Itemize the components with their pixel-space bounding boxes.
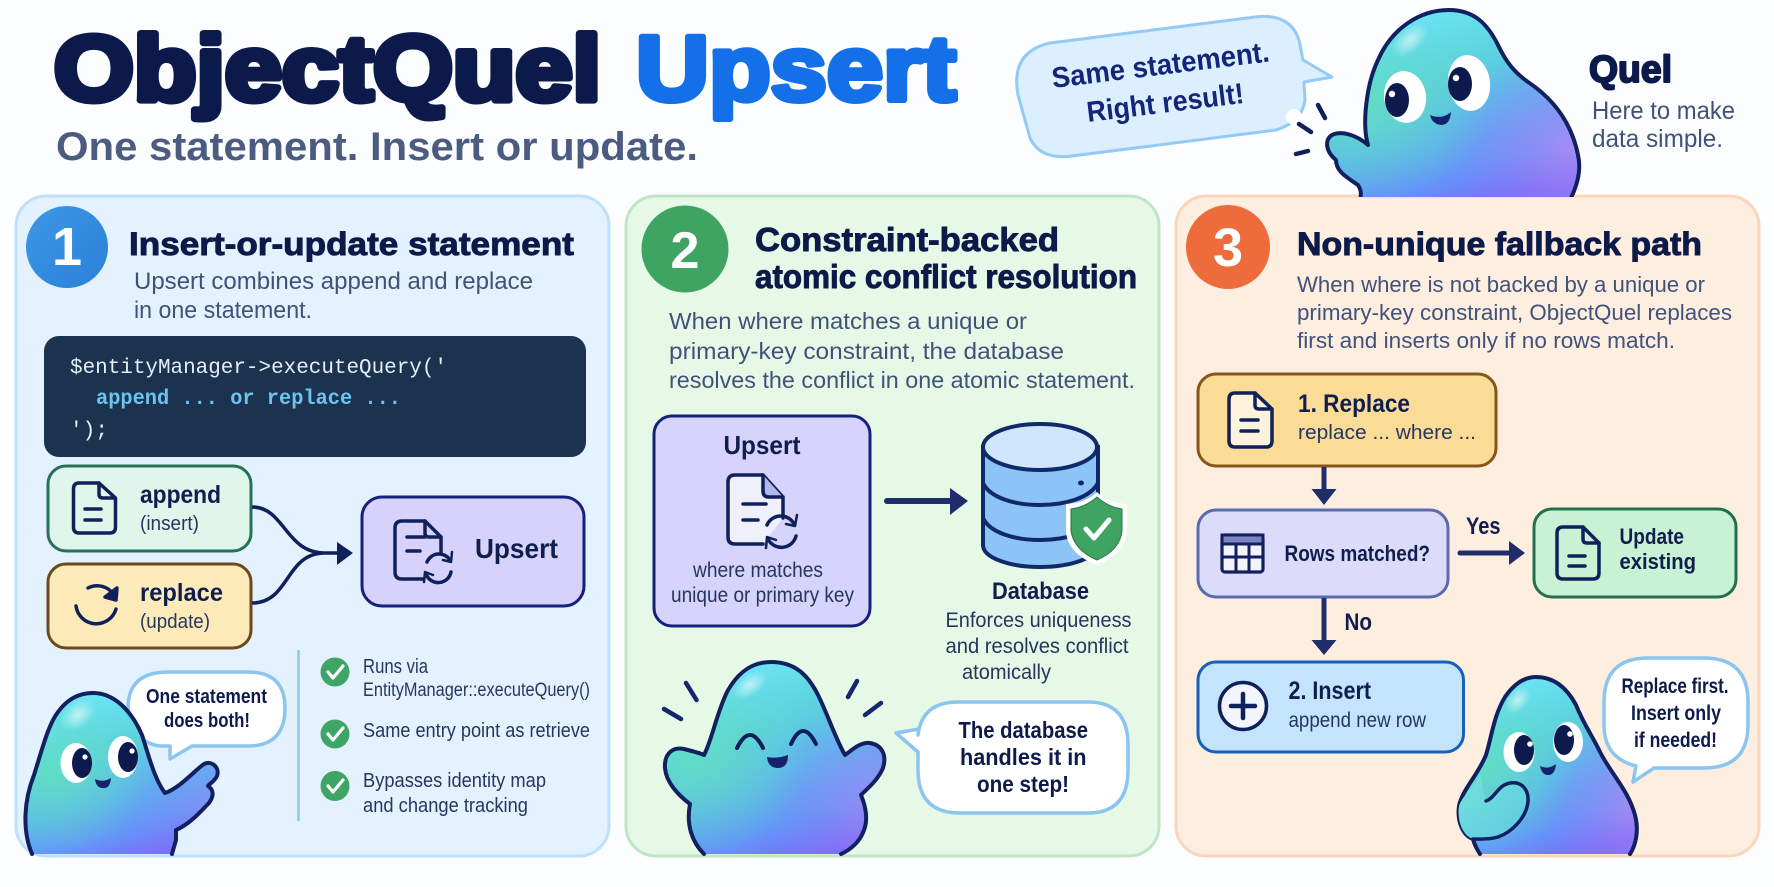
icon: document xyxy=(74,483,116,533)
box: append: append xyxy=(140,481,221,509)
label: database: Database xyxy=(992,578,1089,605)
panel: insert-or-update statement xyxy=(16,196,609,856)
callout: replace first: Replace first. xyxy=(1622,675,1728,698)
divider xyxy=(297,650,300,821)
heading 3: Non-unique fallback path xyxy=(1297,226,1702,262)
icon: document with sync xyxy=(728,475,797,548)
badge 2: 2 xyxy=(671,222,699,280)
description 3: primary-key constraint, ObjectQuel replaces xyxy=(1297,300,1732,325)
box: update existing xyxy=(1534,509,1736,597)
item: bypasses identity map: and change tracking xyxy=(363,795,528,817)
icon: document with sync xyxy=(395,521,452,583)
text: database description: atomically xyxy=(962,661,1051,684)
item: same entry point xyxy=(320,720,590,748)
description 2: primary-key constraint, the database xyxy=(669,338,1064,364)
description 2: resolves the conflict in one atomic statement. xyxy=(669,367,1135,393)
description 1: in one statement. xyxy=(134,297,312,324)
callout: same statement: Right result! xyxy=(1085,78,1246,129)
arrow: merge into upsert xyxy=(252,507,353,603)
title: Upsert xyxy=(636,18,956,120)
callout: database handles it: The database xyxy=(958,717,1088,743)
box: append: (insert) xyxy=(140,513,199,535)
arrow: upsert to database xyxy=(887,488,968,515)
callout: same statement xyxy=(1017,16,1332,157)
badge 1: 1 xyxy=(52,217,82,277)
box: rows matched: Rows matched? xyxy=(1284,541,1430,566)
item: same entry point: Same entry point as retrieve xyxy=(363,720,590,742)
description 3 xyxy=(1297,272,1732,353)
text: database description: and resolves conflict xyxy=(946,635,1129,658)
icon: document xyxy=(1229,393,1272,447)
label: yes: Yes xyxy=(1466,513,1500,540)
mascot tagline xyxy=(1592,97,1735,153)
text: database description: Enforces uniqueness xyxy=(946,609,1132,632)
arrow: yes branch xyxy=(1460,541,1525,565)
box: replace: (update) xyxy=(140,611,210,633)
icon: table xyxy=(1222,535,1263,572)
code block: $entityManager->executeQuery(' xyxy=(70,357,447,380)
heading 2 xyxy=(755,221,1137,295)
box: insert step: append new row xyxy=(1288,709,1427,732)
label: no: No xyxy=(1344,609,1372,636)
callout: same statement: Same statement. xyxy=(1050,36,1271,95)
callout: replace first xyxy=(1604,658,1748,782)
panel: non-unique fallback path xyxy=(1176,196,1759,856)
callout: database handles it: handles it in xyxy=(960,744,1086,770)
mascot tagline: data simple. xyxy=(1592,125,1723,153)
code block: append ... or replace ... xyxy=(96,388,401,411)
icon: database with shield xyxy=(983,424,1127,567)
text: database description xyxy=(946,609,1132,684)
box: upsert: Upsert xyxy=(724,430,801,460)
description 3: first and inserts only if no rows match. xyxy=(1297,328,1675,353)
badge 2 xyxy=(642,206,728,292)
title xyxy=(54,18,956,120)
callout: replace first: Insert only xyxy=(1631,702,1721,725)
arrow: replace to rows matched xyxy=(1312,467,1336,505)
mascot: thinking xyxy=(1459,677,1637,854)
box: rows matched xyxy=(1198,510,1448,597)
mascot name: Quel: Quel xyxy=(1589,49,1672,91)
icon: document xyxy=(1557,527,1599,579)
mascot: Quel pointing xyxy=(1296,10,1579,200)
heading 1: Insert-or-update statement xyxy=(129,226,574,262)
box: append xyxy=(48,466,251,551)
icon: refresh xyxy=(76,586,117,624)
code block xyxy=(44,336,586,457)
box: insert step xyxy=(1198,662,1464,752)
checklist xyxy=(320,656,590,817)
callout: database handles it: one step! xyxy=(977,771,1069,797)
panel: constraint-backed conflict resolution xyxy=(626,196,1159,856)
mascot: celebrating xyxy=(664,662,884,854)
box: upsert: Upsert xyxy=(475,533,558,564)
callout: one statement does both: does both! xyxy=(164,710,250,732)
callout: one statement does both: One statement xyxy=(146,686,267,708)
callout: replace first: if needed! xyxy=(1634,729,1717,752)
icon: plus xyxy=(1220,682,1266,730)
item: runs via: Runs via xyxy=(363,656,429,678)
box: replace step xyxy=(1198,374,1496,466)
box: upsert: where matches xyxy=(692,559,823,582)
box: replace: replace xyxy=(140,579,223,607)
box: insert step: 2. Insert xyxy=(1288,677,1372,705)
box: update existing: existing xyxy=(1620,549,1696,574)
callout: one statement does both xyxy=(128,672,285,759)
badge 3 xyxy=(1186,205,1270,289)
mascot: pointing xyxy=(25,693,218,854)
box: replace step: 1. Replace xyxy=(1298,390,1410,418)
description 1 xyxy=(134,268,533,324)
box: update existing: Update xyxy=(1620,524,1684,549)
description 2 xyxy=(669,308,1135,393)
description 1: Upsert combines append and replace xyxy=(134,268,533,295)
subtitle: One statement. Insert or update. xyxy=(56,125,698,169)
box: upsert xyxy=(362,497,584,606)
callout: database handles it xyxy=(896,702,1128,813)
item: bypasses identity map xyxy=(320,770,546,817)
description 2: When where matches a unique or xyxy=(669,308,1027,334)
heading 2: atomic conflict resolution xyxy=(755,258,1137,295)
item: bypasses identity map: Bypasses identity map xyxy=(363,770,546,792)
heading 2: Constraint-backed xyxy=(755,221,1059,258)
box: replace xyxy=(48,564,251,648)
arrow: no branch xyxy=(1312,598,1336,655)
badge 1 xyxy=(26,206,108,288)
code block: '); xyxy=(70,420,108,443)
box: upsert xyxy=(654,416,870,626)
mascot tagline: Here to make xyxy=(1592,97,1735,125)
box: upsert: unique or primary key xyxy=(671,584,854,607)
box: replace step: replace ... where ... xyxy=(1298,422,1476,444)
item: runs via xyxy=(320,656,590,701)
description 3: When where is not backed by a unique or xyxy=(1297,272,1705,297)
badge 3: 3 xyxy=(1213,218,1243,278)
title: ObjectQuel xyxy=(54,18,601,120)
item: runs via: EntityManager::executeQuery() xyxy=(363,680,590,701)
